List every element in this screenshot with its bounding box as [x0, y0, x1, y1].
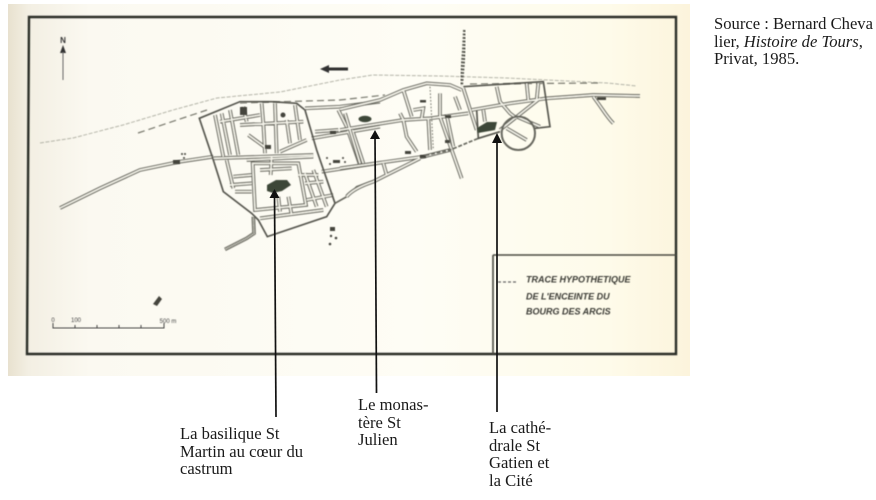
arrow: monastery: [370, 130, 380, 393]
label: basilica: [180, 424, 303, 478]
scale bar: 500 m: [160, 319, 176, 325]
basilica: [267, 180, 291, 193]
label: basilica: Martin au cœur du: [180, 442, 303, 461]
label: monastery: [358, 395, 428, 449]
castrum streets: [60, 102, 380, 249]
label: cathedral: drale St: [489, 436, 540, 455]
street network: [60, 82, 640, 249]
label: cathedral: [489, 418, 551, 490]
label: basilica: La basilique St: [180, 424, 280, 443]
label: cathedral: La cathé-: [489, 418, 551, 437]
monuments: [153, 97, 606, 306]
bridge: [461, 30, 465, 86]
source note: lier, Histoire de Tours,: [714, 32, 863, 51]
source note: Source : Bernard Cheva: [714, 14, 873, 33]
small buildings: [153, 97, 606, 306]
source note: Privat, 1985.: [714, 49, 799, 68]
monastery: [358, 116, 372, 122]
label: monastery: Le monas-: [358, 395, 428, 414]
arrow: cathedral: [492, 133, 502, 412]
label: monastery: tère St: [358, 413, 401, 432]
label: cathedral: Gatien et: [489, 453, 549, 472]
source note: [714, 14, 873, 68]
scale bar: 100: [71, 318, 82, 324]
photo background: [8, 4, 690, 376]
icon: north arrow: [60, 36, 66, 80]
icon: direction arrow: [320, 65, 348, 73]
scale bar: [51, 318, 176, 328]
label: monastery: Julien: [358, 430, 398, 449]
map frame: [27, 17, 676, 354]
legend: [498, 274, 632, 316]
river banks and dashed enclosure: [40, 75, 637, 143]
icon: north arrow: N: [60, 36, 66, 45]
label: cathedral: la Cité: [489, 471, 533, 490]
arrow: basilica: [270, 189, 280, 417]
legend: DE L'ENCEINTE DU: [526, 292, 610, 302]
eastern streets and cite: [340, 82, 640, 197]
scale bar: 0: [51, 318, 55, 324]
cathedral: [477, 122, 497, 133]
label: basilica: castrum: [180, 459, 233, 478]
legend: TRACE HYPOTHETIQUE: [526, 274, 632, 284]
legend: BOURG DES ARCIS: [526, 306, 611, 316]
